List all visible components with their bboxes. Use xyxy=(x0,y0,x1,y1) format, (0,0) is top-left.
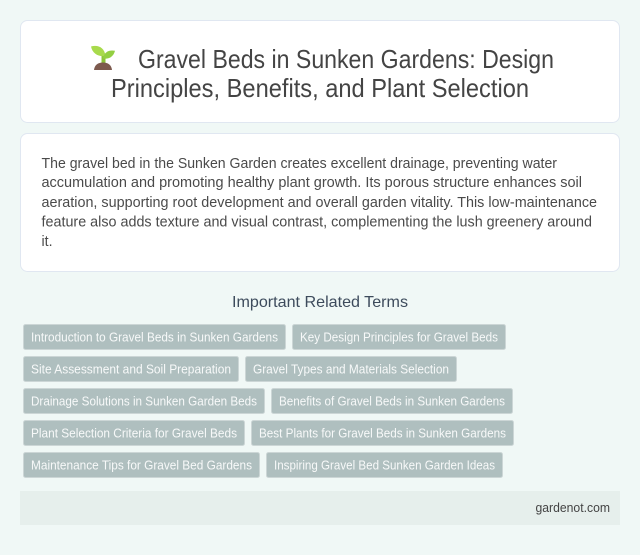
tag xyxy=(246,356,456,382)
tag: Plant Selection Criteria for Gravel Beds xyxy=(31,426,237,440)
tag: Gravel Types and Materials Selection xyxy=(253,362,449,376)
text block: description: feature also adds texture and visual contrast, complementing the lush greenery around xyxy=(42,214,592,230)
footer: gardenot.com xyxy=(536,500,610,515)
tag xyxy=(24,356,238,382)
tag: Introduction to Gravel Beds in Sunken Gardens xyxy=(31,330,278,344)
tag xyxy=(272,388,512,414)
panel: description xyxy=(20,134,620,272)
tag xyxy=(24,388,264,414)
text block: description: it. xyxy=(42,233,52,250)
panel: title card xyxy=(20,20,620,122)
tag: Maintenance Tips for Gravel Bed Gardens xyxy=(31,458,252,472)
icon: seedling xyxy=(91,46,115,70)
tag xyxy=(252,420,514,446)
text block: description xyxy=(42,155,597,250)
heading: related terms: Important Related Terms xyxy=(232,294,408,311)
text block: description: The gravel bed in the Sunken Garden creates excellent drainage, preventing water xyxy=(42,155,557,172)
tag xyxy=(24,420,244,446)
tag: Site Assessment and Soil Preparation xyxy=(31,362,231,376)
tag xyxy=(24,452,260,478)
tag xyxy=(266,452,502,478)
tag: Drainage Solutions in Sunken Garden Beds xyxy=(31,394,257,408)
title xyxy=(111,46,554,103)
title: Principles, Benefits, and Plant Selection xyxy=(111,75,529,103)
related term tags xyxy=(24,324,514,478)
tag xyxy=(292,324,506,350)
tag xyxy=(24,324,286,350)
tag: Inspiring Gravel Bed Sunken Garden Ideas xyxy=(274,458,495,472)
tag: Key Design Principles for Gravel Beds xyxy=(300,330,498,344)
text block: description: aeration, supporting root development and overall garden vitality. This low-maintenance xyxy=(42,194,597,211)
tag: Benefits of Gravel Beds in Sunken Gardens xyxy=(279,394,505,408)
text block: description: accumulation and promoting healthy plant growth. Its porous structure enhances soil xyxy=(42,174,582,191)
footer xyxy=(20,491,620,525)
tag: Best Plants for Gravel Beds in Sunken Gardens xyxy=(259,426,506,440)
title: Gravel Beds in Sunken Gardens: Design xyxy=(138,46,554,74)
